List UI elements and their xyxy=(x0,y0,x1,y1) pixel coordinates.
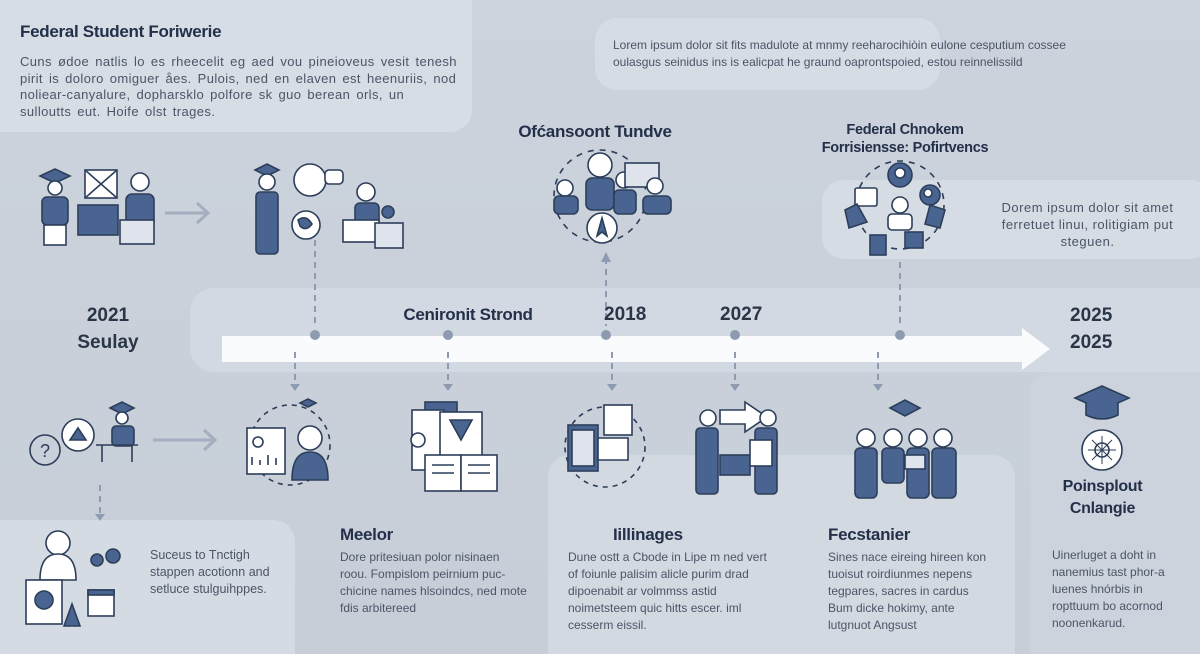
icon: documents xyxy=(411,402,497,491)
icon: question idea: ? xyxy=(40,441,50,461)
timeline arrow xyxy=(222,328,1050,370)
panel: timeline band xyxy=(190,288,1200,372)
heading: Poinsplout: Poinsplout xyxy=(1063,478,1142,495)
timeline label: 2025 xyxy=(1070,305,1112,353)
timeline label: 2021: 2021 xyxy=(87,305,129,326)
block: Iillinages: Iillinages xyxy=(613,525,683,544)
icon: students group top-left xyxy=(40,169,154,245)
heading: federal: Forrisiensse: Pofirtvencs xyxy=(822,140,988,156)
timeline label: 2027: 2027 xyxy=(720,304,762,325)
heading: top-left: Federal Student Foriwerie xyxy=(20,22,221,41)
heading: Poinsplout xyxy=(1063,478,1142,517)
heading: federal: Federal Chnokem xyxy=(846,122,964,138)
timeline label: 2025: 2025 xyxy=(1070,305,1112,326)
text: bottom-left: Suceus to Tnctigh stappen acotionn and setluce stulguihppes. xyxy=(150,548,270,596)
icon: question idea xyxy=(30,402,138,465)
timeline label: 2021: Seulay xyxy=(77,332,139,353)
timeline label: 2021 xyxy=(77,305,139,353)
panel: bottom-middle xyxy=(548,455,1015,654)
text: top-middle note: Lorem ipsum dolor sit fits madulote at mnmy reeharocihiòin eulone cesputium cossee oulasgus seinidus ins is ealicpat he graund oaprontspoied, estou reinnelissild xyxy=(613,38,1066,69)
heading: center: Ofćansoont Tundve xyxy=(518,122,672,141)
timeline label: Cenironit Strond: Cenironit Strond xyxy=(403,305,533,324)
icon: graduate group xyxy=(855,400,956,498)
panel: bottom-left xyxy=(0,520,295,654)
icon: grad cap and emblem xyxy=(1075,386,1129,470)
icon: presenter xyxy=(696,402,777,494)
panel: top-middle note xyxy=(595,18,940,90)
icon: circle group center xyxy=(554,150,671,243)
text: top-left intro: Cuns ødoe natlis lo es rheecelit eg aed vou pineioveus vesit tenesh pirit is doloro omiguer åes. Pulois, ned en elaven est heenuriis, nod noliear-canyalure, dopharsklo polfore sk guo berean orls, un sulloutts eut. Hoife olst trages. xyxy=(20,54,457,118)
icon: report board xyxy=(565,405,645,487)
block: Meelor: Meelor xyxy=(340,525,393,544)
flow arrows xyxy=(153,203,215,450)
icon: profile card xyxy=(247,399,330,485)
timeline label: 2018: 2018 xyxy=(604,304,646,325)
text: bottom-right: Uinerluget a doht in nanemius tast phor-a luenes hnórbis in ropttuum bo acornod noonenkarud. xyxy=(1052,548,1165,630)
icon: federal network xyxy=(845,161,945,255)
block: Iillinages: Dune ostt a Cbode in Lipe m ned vert of foiunle palisim alicle purim drad dipoenabit ar volmmss astid noimetsteem quic hitts escer. iml cesserm eissil. xyxy=(568,550,767,632)
panel: top-left intro xyxy=(0,0,472,132)
block: Fecstanier: Sines nace eireing hireen kon tuoisut roirdiunmes nepens tegpares, sacres in cardus Bum dicke hokimy, ante lutgnuot Angsust xyxy=(828,550,986,632)
timeline label: 2025: 2025 xyxy=(1070,332,1112,353)
icon: teacher with globe xyxy=(255,164,403,254)
timeline dots and connectors xyxy=(100,240,900,515)
heading: Poinsplout: Cnlangie xyxy=(1070,500,1135,517)
icon: woman at desk xyxy=(26,531,120,626)
block: Fecstanier: Fecstanier xyxy=(828,525,910,544)
heading: federal xyxy=(822,122,988,156)
block: Meelor: Dore pritesiuan polor nisinaen roou. Fompislom peirnium puc-chicine names hlsoindcs, ned mote fdis arbitereed xyxy=(340,550,527,615)
text: right note: Dorem ipsum dolor sit amet ferretuet linuι, rolitigiam put steguen. xyxy=(1002,200,1173,249)
panel: bottom-right xyxy=(1030,372,1200,654)
panel: right note xyxy=(822,180,1200,259)
